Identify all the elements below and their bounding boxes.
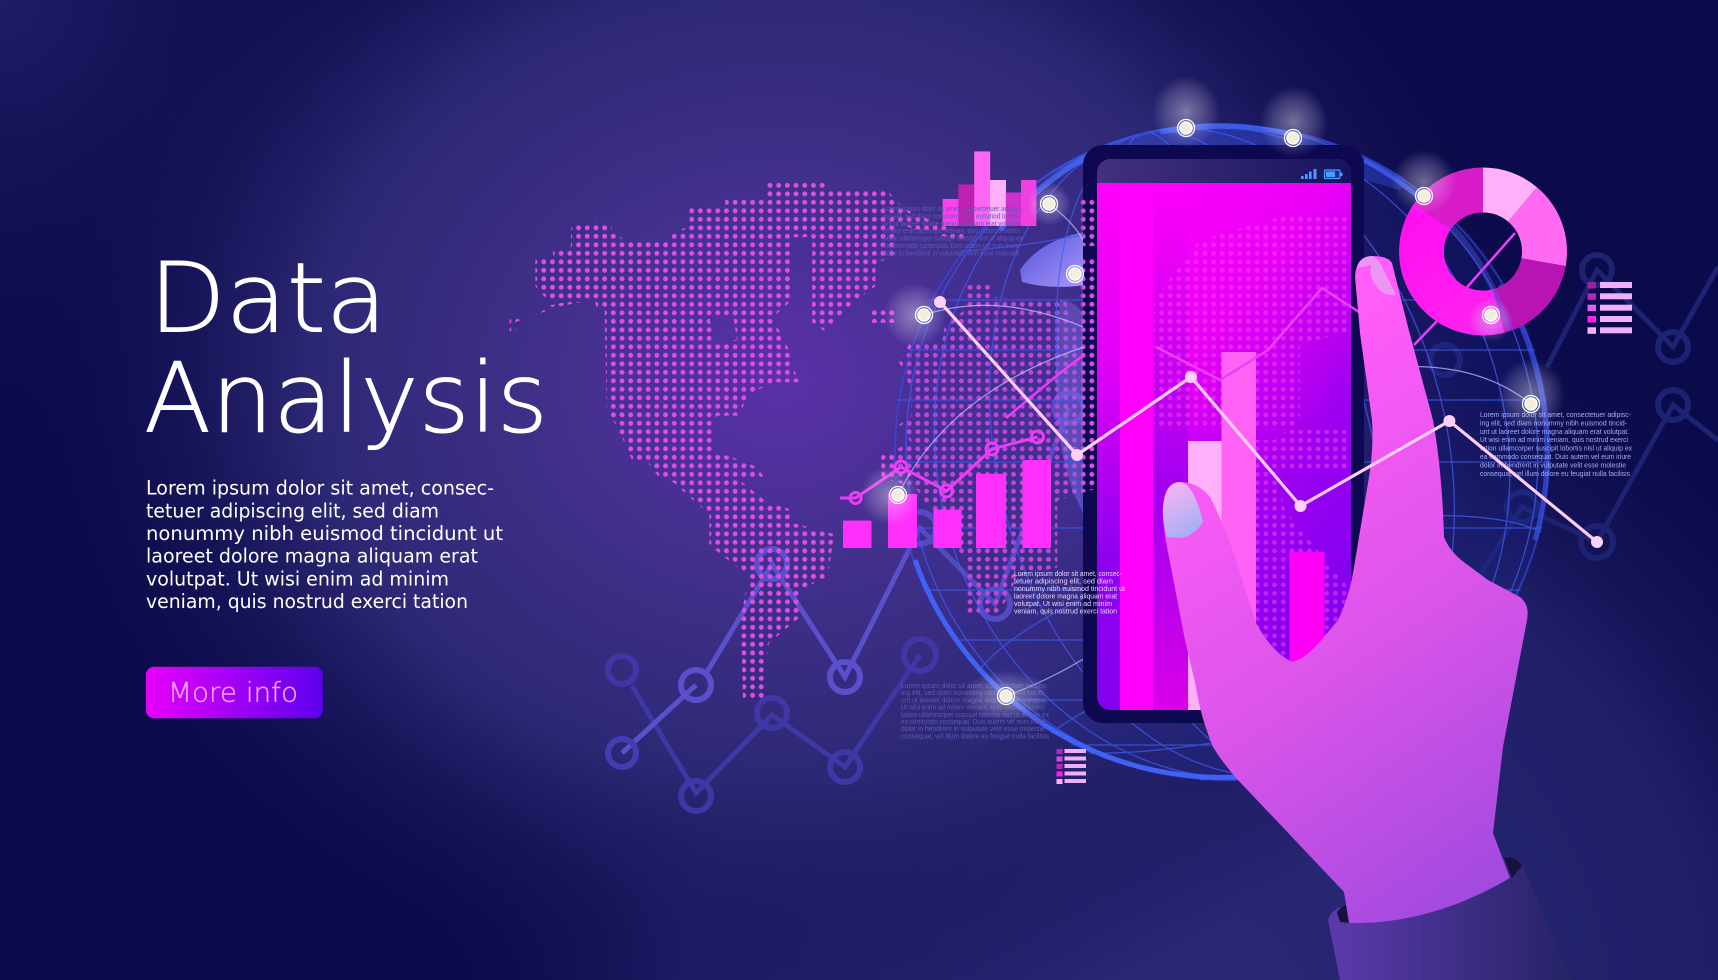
body paragraph: Lorem ipsum dolor sit amet, consec-	[146, 476, 494, 500]
text block: upper map caption: ea commodo consequat. Duis autem vel eum iriure	[883, 241, 1019, 250]
donut chart	[1399, 168, 1567, 335]
small bar chart: top	[943, 151, 1036, 226]
magenta line chart	[840, 345, 1097, 504]
line charts background: left	[608, 393, 1084, 811]
text block: globe caption lower: tation ullamcorper suscipit lobortis nisl ut aliquip ex	[901, 710, 1049, 719]
front line chart	[608, 393, 1084, 767]
text block: globe caption lower: ea commodo consequat. Duis autem vel eum iriure	[901, 717, 1045, 726]
text block: globe caption lower: ing elit, sed diam nonummy nibh euismod tincid-	[901, 688, 1046, 697]
text block: right caption: ea commodo consequat. Duis autem vel eum iriure	[1480, 452, 1631, 461]
text block: right caption: tation ullamcorper suscipit lobortis nisl ut aliquip ex	[1480, 444, 1632, 453]
text block: upper map caption: Ut wisi enim ad minim veniam, quis nostrud exerci	[883, 226, 1019, 235]
text block: upper map caption: tation ullamcorper suscipit lobortis nisl ut aliquip ex	[883, 234, 1023, 243]
text block: phone caption: volutpat. Ut wisi enim ad minim	[1014, 599, 1112, 608]
body paragraph	[146, 476, 503, 613]
text block: right caption: ing elit, sed diam nonummy nibh euismod tincid-	[1480, 418, 1628, 427]
dotted world map	[500, 170, 1100, 710]
legend: right	[1588, 282, 1632, 334]
button: more info	[146, 667, 323, 718]
text block: phone caption: veniam, quis nostrud exerci tation	[1014, 606, 1117, 616]
text block: right caption: Lorem ipsum dolor sit amet, consectetuer adipisc-	[1480, 410, 1632, 419]
body paragraph: nonummy nibh euismod tincidunt ut	[146, 522, 503, 545]
main data line chart	[934, 296, 1603, 548]
text block: right caption: Ut wisi enim ad minim veniam, quis nostrud exerci	[1480, 435, 1628, 444]
title	[144, 243, 548, 455]
phone	[1083, 145, 1364, 723]
phone body	[1083, 145, 1364, 723]
text block: globe caption lower: dolor in hendrerit in vulputate velit esse molestie	[901, 724, 1045, 733]
map dots over phone bezel	[1083, 200, 1094, 493]
text block: phone caption	[1014, 569, 1125, 616]
text block: upper map caption: dolor in hendrerit in vulputate velit esse molestie	[883, 248, 1019, 257]
text block: right caption	[1480, 410, 1632, 478]
text block: globe caption lower: Ut wisi enim ad minim veniam, quis nostrud exerci	[901, 703, 1045, 712]
text block: right caption: dolor in hendrerit in vulputate velit esse molestie	[1480, 460, 1626, 469]
globe rim	[895, 125, 1549, 779]
text block: upper map caption: Lorem ipsum dolor sit amet, consectetuer adipisc-	[883, 204, 1024, 213]
phone screen	[1097, 159, 1351, 710]
text block: upper map caption	[883, 204, 1024, 257]
body paragraph: volutpat. Ut wisi enim ad minim	[146, 568, 449, 590]
button: more info: More info	[168, 678, 298, 709]
text block: phone caption: Lorem ipsum dolor sit amet, consec-	[1014, 569, 1123, 578]
globe grid	[893, 123, 1551, 781]
magenta line on phone	[1156, 233, 1515, 380]
legend: lower	[1056, 749, 1086, 784]
finger nail	[1357, 256, 1396, 295]
palm and fingers	[1163, 256, 1528, 923]
bar chart: lower	[843, 460, 1051, 548]
status icons	[1301, 169, 1342, 179]
rear line chart	[608, 639, 936, 811]
line charts background: right	[1430, 255, 1718, 640]
text block: right caption: unt ut laoreet dolore magna aliquam erat volutpat.	[1480, 427, 1629, 436]
body paragraph: tetuer adipiscing elit, sed diam	[146, 500, 439, 522]
connection arcs	[898, 204, 1531, 696]
text block: globe caption lower: Lorem ipsum dolor sit amet, consectetuer adipisc-	[901, 681, 1050, 690]
text block: globe caption lower: consequat, vel illum dolore eu feugiat nulla facilisis	[901, 731, 1049, 740]
text block: globe caption lower	[901, 681, 1050, 740]
text block: phone caption: nonummy nibh euismod tincidunt ut	[1014, 584, 1125, 593]
text block: upper map caption: ing elit, sed diam nonummy nibh euismod tincid-	[883, 211, 1020, 220]
cuff openings	[1337, 857, 1522, 923]
globe location markers	[860, 76, 1565, 722]
globe continents	[1010, 114, 1420, 520]
hand	[1163, 256, 1572, 980]
text block: phone caption: laoreet dolore magna aliquam erat	[1014, 592, 1117, 600]
text block: upper map caption: unt ut laoreet dolore magna aliquam erat volutpat.	[883, 219, 1022, 228]
body paragraph: laoreet dolore magna aliquam erat	[146, 544, 478, 568]
text block: phone caption: tetuer adipiscing elit, sed diam	[1014, 576, 1113, 586]
title: Data	[149, 243, 387, 355]
globe	[893, 123, 1551, 781]
body paragraph: veniam, quis nostrud exerci tation	[146, 590, 468, 613]
thumb nail	[1163, 482, 1203, 538]
text block: globe caption lower: unt ut laoreet dolore magna aliquam erat volutpat.	[901, 695, 1048, 704]
text block: right caption: consequat, vel illum dolore eu feugiat nulla facilisis	[1480, 469, 1630, 478]
title: Analysis	[144, 343, 548, 455]
sleeve	[1328, 857, 1572, 980]
